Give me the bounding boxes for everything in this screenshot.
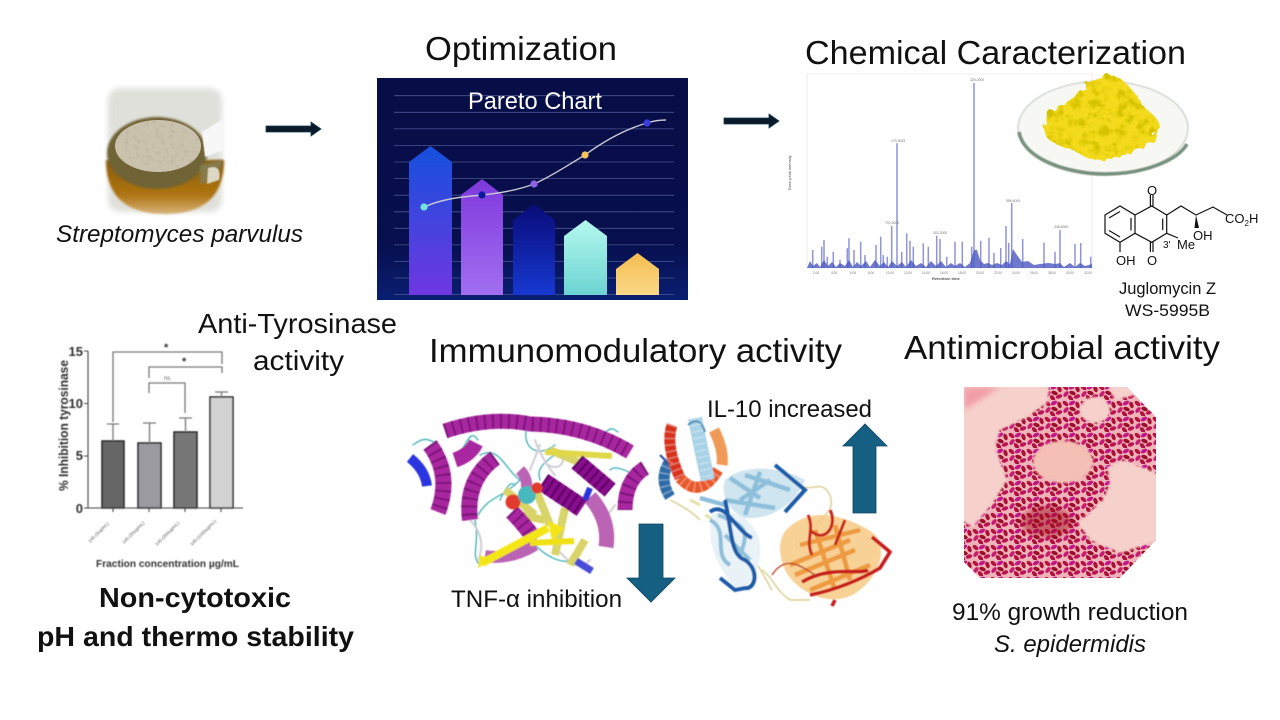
light blue domain xyxy=(724,469,805,518)
axis labels: 32.00 xyxy=(1084,271,1092,275)
thin loops xyxy=(413,424,635,565)
axis labels xyxy=(787,78,1092,281)
molecule stereo wedge xyxy=(1194,215,1199,228)
caption: 91% growth reduction: 91% growth reduction xyxy=(952,599,1188,626)
thin connecting loops xyxy=(670,486,831,600)
axis labels: 16.00 xyxy=(940,271,948,275)
chart: tyrosinase inhibition bar chart xyxy=(57,342,243,570)
molecule atom labels xyxy=(1116,183,1258,268)
concentration labels: 145-(30ug/mL) xyxy=(121,520,146,545)
tick labels: 15 xyxy=(69,344,83,359)
axis labels: Base peak intensity xyxy=(787,155,792,190)
upper-left pink tint xyxy=(964,387,1000,410)
dark blue strands xyxy=(710,465,805,590)
axis labels: 348.8000 xyxy=(1054,225,1068,229)
heading: Anti-Tyrosinase activity: Anti-Tyrosinase xyxy=(198,308,397,339)
axes xyxy=(84,351,243,512)
structure: Juglomycin Z molecule xyxy=(1105,183,1258,268)
axis labels: 26.00 xyxy=(1030,271,1038,275)
grid lines xyxy=(394,96,674,295)
axis labels: 703.3000 xyxy=(885,221,899,225)
axis labels: 18.00 xyxy=(958,271,966,275)
pale yellow sheets xyxy=(505,450,585,565)
figure: TNF-alpha protein structure xyxy=(410,421,645,571)
significance marks: ns xyxy=(164,376,170,382)
molecule atom labels: 2 xyxy=(1244,219,1250,228)
axis labels: 325.2000 xyxy=(970,78,984,82)
axis labels: 20.00 xyxy=(976,271,984,275)
caption: Streptomyces parvulus: Streptomyces parvulus xyxy=(56,221,303,248)
helix cluster turn shading xyxy=(664,418,718,497)
molecule bonds xyxy=(1105,195,1227,252)
heading: Anti-Tyrosinase activity: activity xyxy=(253,345,344,376)
heading: Anti-Tyrosinase activity xyxy=(198,308,397,376)
pareto bars xyxy=(409,146,659,295)
axis labels: 2.00 xyxy=(813,271,819,275)
tick labels: 5 xyxy=(76,448,83,463)
significance marks xyxy=(164,342,187,382)
molecule atom labels: H xyxy=(1249,211,1258,226)
tick labels: 10 xyxy=(69,396,83,411)
cumulative curve with markers xyxy=(420,119,666,211)
text: Non-cytotoxic, pH and thermo stability xyxy=(37,582,354,652)
axis labels: 14.00 xyxy=(922,271,930,275)
middle domain pale fill xyxy=(710,512,760,588)
blue terminal ends xyxy=(410,458,427,486)
heading: Chemical Caracterization: Chemical Caracterization xyxy=(805,34,1186,71)
magenta helices xyxy=(430,421,645,540)
panel: Pareto chart xyxy=(377,78,688,300)
axis labels: 6.00 xyxy=(850,271,856,275)
concentration labels xyxy=(87,518,217,547)
compound name: Juglomycin Z, WS-5995B: Juglomycin Z xyxy=(1119,279,1216,298)
molecule atom labels: Me xyxy=(1177,237,1195,252)
blue helix domain xyxy=(664,461,670,497)
chart title: Pareto Chart: Pareto Chart xyxy=(468,88,602,115)
tick labels xyxy=(69,344,83,516)
molecule atom labels: CO xyxy=(1225,211,1244,226)
axis labels: 10.00 xyxy=(886,271,894,275)
axis labels: 12.00 xyxy=(904,271,912,275)
molecule atom labels: O xyxy=(1147,183,1157,198)
axis title: Fraction concentration: Fraction concentration µg/mL xyxy=(96,558,240,570)
significance marks: * xyxy=(164,342,169,354)
heading: Antimicrobial activity: Antimicrobial activity xyxy=(904,329,1221,366)
molecule atom labels: O xyxy=(1147,253,1157,268)
concentration labels: 145-(300ug/mL) xyxy=(154,520,181,547)
molecule atom labels: OH xyxy=(1116,253,1136,268)
heading: Optimization: Optimization xyxy=(425,30,617,67)
text: TNF-α inhibition: TNF-α inhibition xyxy=(451,586,622,613)
axis labels: 4.00 xyxy=(831,271,837,275)
axis title: % Inhibition tyrosinase: % Inhibition tyrosinase xyxy=(57,360,71,491)
bright yellow sheets xyxy=(482,528,548,563)
arrow: optimization to characterization xyxy=(724,114,779,128)
chromatogram baseline trace xyxy=(807,249,1092,268)
axis labels: 179.0033 xyxy=(891,139,905,143)
photo: Streptomyces culture flask xyxy=(106,88,224,214)
dense dark cell cluster xyxy=(1021,506,1073,538)
photo: stained S. epidermidis micrograph xyxy=(960,383,1160,578)
compound name: Juglomycin Z, WS-5995B xyxy=(1119,279,1216,320)
text: IL-10 increased: IL-10 increased xyxy=(707,396,872,423)
orange and red helix cluster xyxy=(670,425,680,478)
helix turn shading xyxy=(430,421,645,540)
compound name: Juglomycin Z, WS-5995B: WS-5995B xyxy=(1125,301,1210,320)
heading: Immunomodulatory activity: Immunomodulatory activity xyxy=(429,332,843,369)
text: Non-cytotoxic, pH and thermo stability: Non-cytotoxic xyxy=(99,582,291,613)
dark helix turn shading xyxy=(543,462,610,508)
ligand spheres xyxy=(506,494,520,510)
axis labels: 28.00 xyxy=(1048,271,1056,275)
axis labels: Retention time xyxy=(932,276,961,281)
molecule atom labels: 3' xyxy=(1163,240,1171,251)
arrow: culture to optimization xyxy=(266,122,321,136)
tick labels: 0 xyxy=(76,501,83,516)
chart: chromatogram xyxy=(787,74,1092,281)
figure: IL-10 protein structure xyxy=(660,418,890,606)
arrow: down, TNF-alpha inhibition xyxy=(627,524,675,602)
dark purple helices xyxy=(543,462,610,508)
axis labels: 22.00 xyxy=(994,271,1002,275)
orange and red domain xyxy=(780,515,881,599)
concentration labels: 145-(1000ug/mL) xyxy=(189,518,217,547)
axis labels: 8.00 xyxy=(868,271,874,275)
pale magenta helices xyxy=(485,470,607,557)
arrow: up, IL-10 increased xyxy=(843,424,887,513)
chromatogram peaks xyxy=(813,83,1091,268)
axis labels: 556.4000 xyxy=(1006,199,1020,203)
photo: yellow compound powder in a petri dish xyxy=(1018,75,1188,175)
axis labels: 30.00 xyxy=(1066,271,1074,275)
molecule atom labels: OH xyxy=(1193,228,1212,243)
significance marks: * xyxy=(182,356,187,368)
bars xyxy=(102,397,233,508)
axis labels: 303.2000 xyxy=(933,231,947,235)
error bars and significance brackets xyxy=(107,352,228,443)
pale background patches xyxy=(960,383,1160,553)
axis labels: 24.00 xyxy=(1012,271,1020,275)
caption: S. epidermidis: S. epidermidis xyxy=(994,631,1146,658)
text: Non-cytotoxic, pH and thermo stability: pH and thermo stability xyxy=(37,621,354,652)
concentration labels: 145-(3ug/mL) xyxy=(87,521,110,544)
